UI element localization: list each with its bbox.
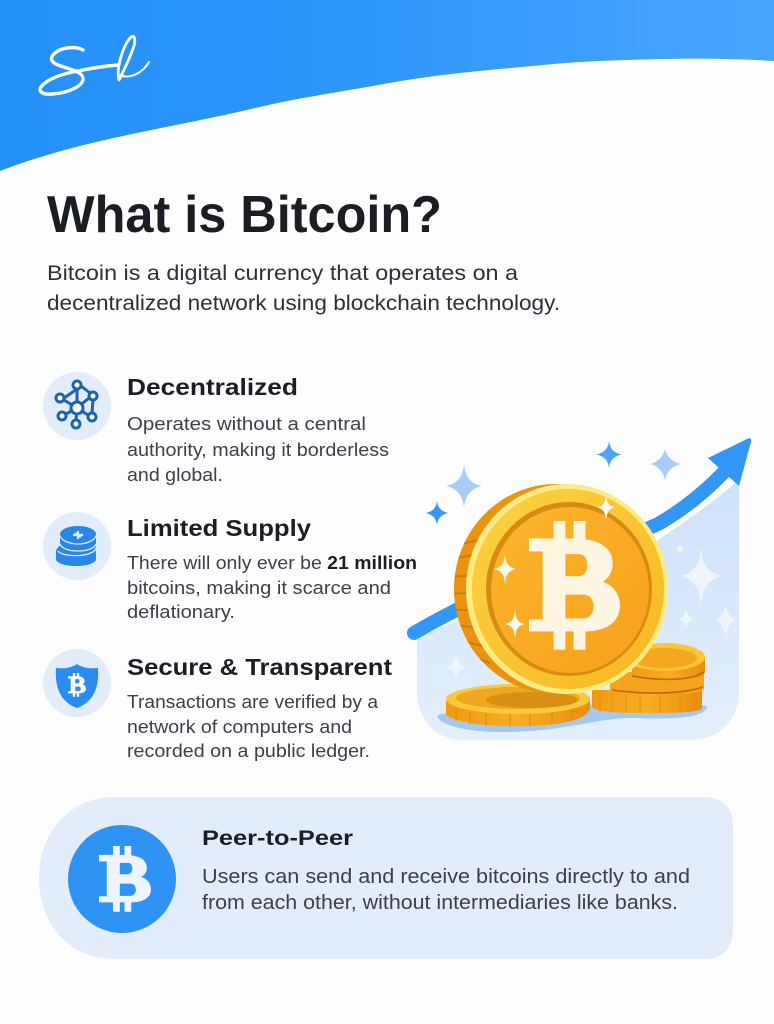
coin sparkles [494,494,615,638]
feature: limited supply [43,512,417,622]
header wave [0,0,774,171]
illustration: bitcoin growth [414,438,751,740]
icon: shield [43,649,111,717]
bitcoin symbol [529,521,620,650]
coin stack shadow [437,704,707,732]
arrow: upward trend [414,438,751,633]
heading: decentralized: Decentralized [127,374,298,400]
heading: secure and transparent: Secure & Transparent [127,654,392,680]
icon: coin stack [43,512,111,580]
intro paragraph: decentralized network using blockchain technology. [47,292,560,315]
icon: bitcoin badge [68,825,176,933]
main bitcoin coin [450,484,668,694]
text: limited supply description: bitcoins, making it scarce and [127,578,391,598]
icon: network [43,372,111,440]
text: limited supply description: deflationary. [127,602,235,622]
title: What is Bitcoin? [47,186,442,244]
panel: peer-to-peer [39,797,733,959]
text: secure description: network of computers and [127,717,352,737]
text: secure description: Transactions are verified by a [127,692,379,712]
text: secure description [127,692,379,761]
text: peer-to-peer description [202,866,690,914]
sparkles: blue [426,441,681,525]
sparkles: pale [446,543,736,680]
text: decentralized description: and global. [127,465,223,485]
logo signature [40,36,149,94]
intro paragraph [47,262,560,315]
text: decentralized description: Operates without a central [127,414,366,434]
text: peer-to-peer description: Users can send and receive bitcoins directly to and [202,866,690,888]
heading: limited supply: Limited Supply [127,515,311,541]
feature: secure and transparent [43,649,392,761]
heading: peer-to-peer: Peer-to-Peer [202,827,353,850]
right coin stack [592,643,705,713]
front flat coin [446,684,590,726]
panel background [39,797,733,959]
feature: decentralized [43,372,389,485]
text: limited supply description [127,553,417,622]
text: peer-to-peer description: from each other, without intermediaries like banks. [202,892,678,914]
text: secure description: recorded on a public ledger. [127,741,370,761]
text: decentralized description [127,414,389,485]
text: decentralized description: authority, making it borderless [127,440,389,460]
text: limited supply description: There will only ever be 21 million [127,553,417,573]
intro paragraph: Bitcoin is a digital currency that operates on a [47,262,518,285]
chart area panel [417,480,739,740]
